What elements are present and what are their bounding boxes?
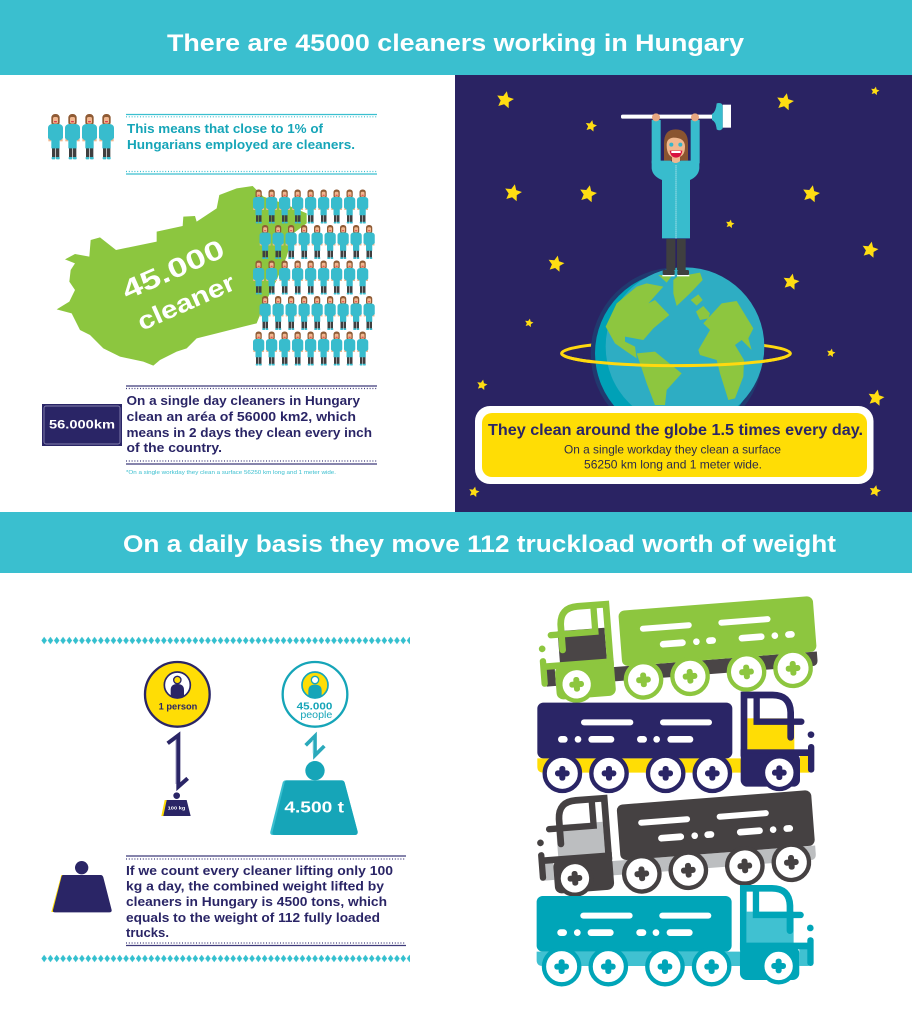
text block: weight lifted: equals to the weight of 112 fully loaded: [126, 911, 380, 925]
truck: navy: [537, 695, 814, 791]
text block: weight lifted: If we count every cleaner lifting only 100: [126, 864, 393, 878]
label: 45.000 cleaner: cleaner: [133, 268, 240, 336]
text block: area cleaned per day: On a single day cleaners in Hungary: [126, 394, 360, 408]
text block: weight lifted: kg a day, the combined weight lifted by: [126, 880, 384, 894]
arrow: people to 4.500 t: [306, 736, 324, 755]
footnote: *On a single workday they clean a surface 56250 km long and 1 meter wide.: [126, 470, 336, 476]
arrow: person to 100 kg: [168, 735, 188, 787]
band title: On a daily basis they move 112 truckload worth of weight: [123, 531, 836, 558]
text block: weight lifted: trucks.: [126, 926, 169, 940]
label: 45.000 cleaner: [117, 234, 240, 336]
icon: 100 kg weight: [161, 792, 191, 816]
text block: area cleaned per day: means in 2 days they clean every inch: [126, 426, 372, 440]
text block: area cleaned per day: [126, 386, 377, 464]
icon: 4.500 t weight: 4.500 t: [284, 799, 345, 816]
callout: around the globe: On a single workday they clean a surface: [564, 442, 781, 456]
diamond divider: top: [41, 636, 410, 645]
sign: 56.000km: [42, 404, 122, 446]
truck: teal: [537, 888, 814, 984]
icon: large weight: [51, 861, 112, 912]
header band: 45000 cleaners: [0, 0, 912, 75]
globe with ring: [562, 267, 790, 439]
callout: around the globe: 56250 km long and 1 meter wide.: [584, 458, 762, 472]
header band: 112 truckload: [0, 512, 912, 573]
truck: green: [536, 588, 819, 705]
text block: weight lifted: cleaners in Hungary is 4500 tons, which: [126, 895, 387, 909]
text block: area cleaned per day: clean an aréa of 56000 km2, which: [126, 410, 356, 424]
text block: share of employed: This means that close to 1% of: [127, 122, 324, 136]
diamond divider: bottom: [41, 954, 410, 963]
badge: 1 person: [145, 662, 210, 727]
text block: area cleaned per day: of the country.: [126, 441, 222, 455]
stars: [468, 86, 886, 497]
cleaner holding broom: [621, 103, 731, 276]
icon: 4.500 t weight: [270, 761, 358, 835]
header title: There are 45000 cleaners working in Hungary: [167, 30, 745, 57]
comparison diagram: person to weight: [145, 662, 358, 835]
broom: [621, 103, 731, 130]
text block: weight lifted: [126, 856, 406, 946]
icon: 100 kg weight: 100 kg: [168, 805, 186, 810]
panel: space scene: [455, 75, 912, 512]
text block: share of employed: Hungarians employed are cleaners.: [127, 138, 355, 152]
icon: four cleaners: [48, 114, 114, 159]
map of Hungary with label: [57, 186, 307, 366]
badge: 1 person: 1 person: [159, 701, 197, 711]
pictogram grid: 45 cleaners: [253, 190, 375, 366]
sign: 56.000km: 56.000km: [49, 418, 115, 432]
truck: dark grey: [534, 782, 818, 899]
label: 45.000 cleaner: 45.000: [117, 234, 229, 305]
badge: 45.000 people: 45.000: [297, 701, 332, 712]
callout: around the globe: They clean around the globe 1.5 times every day.: [488, 422, 863, 439]
badge: 45.000 people: people: [300, 710, 332, 721]
text block: share of employed: [126, 114, 377, 174]
badge: 45.000 people: [283, 662, 347, 727]
callout: around the globe: [475, 406, 874, 484]
